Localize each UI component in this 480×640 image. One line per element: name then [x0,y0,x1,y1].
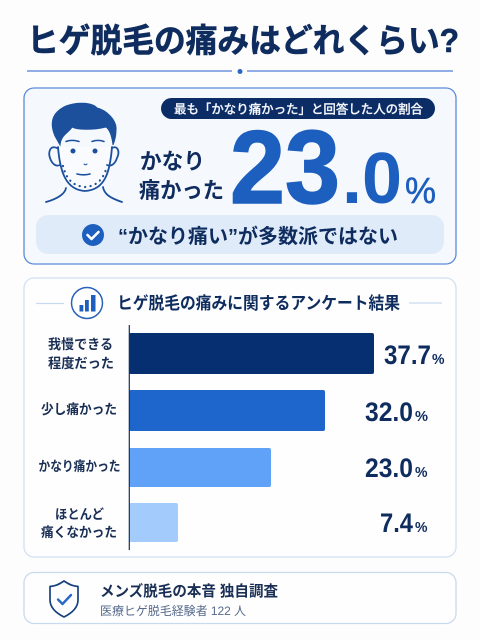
big number: 23.0%: 23 [230,110,340,226]
source details: 医療ヒゲ脱毛経験者 122 人 [100,603,246,618]
title: ヒゲ脱毛の痛みはどれくらい? [27,22,459,59]
bar: bearable 37.7% [48,333,444,374]
bar: bearable 37.7%: % [432,351,444,368]
bar: bearable 37.7%: 37.7 [384,340,431,370]
chart axis [128,325,130,550]
label: very painful: 痛かった [139,178,224,203]
bar: barely painful 7.4% [41,503,428,542]
chart heading [36,288,442,318]
big number: 23.0%: .0 [342,139,402,219]
bar: very painful 23.0%: % [415,464,428,481]
callout: not the majority: “かなり痛い”が多数派ではない [118,224,398,248]
bar chart [38,325,444,550]
bar: barely painful 7.4%: ほとんど [55,507,104,522]
icon: man's face with beard area [46,103,122,202]
title divider [27,69,453,74]
icon: shield with check [50,581,78,617]
chart heading: ヒゲ脱毛の痛みに関するアンケート結果 [117,293,400,313]
bar: a little painful 32.0% [41,390,428,431]
big number: 23.0%: % [405,170,436,211]
callout: not the majority [36,215,444,254]
source title: メンズ脱毛の本音 独自調査 [100,582,278,600]
bar: very painful 23.0%: かなり痛かった [38,459,120,474]
badge: question description: 最も「かなり痛かった」と回答した人の割合 [174,102,423,116]
icon: bar chart [72,288,102,318]
bar: barely painful 7.4%: 痛くなかった [41,525,117,540]
bar: a little painful 32.0%: 少し痛かった [41,401,117,417]
icon: check circle [82,224,104,246]
bar: bearable 37.7%: 我慢できる [48,336,113,352]
label: very painful: かなり [140,149,205,174]
bar: a little painful 32.0%: % [415,408,428,425]
big number: 23.0% [230,110,436,226]
panel: survey results [24,278,456,557]
bar: barely painful 7.4%: 7.4 [380,508,413,538]
bar: very painful 23.0%: 23.0 [365,453,413,483]
bar: a little painful 32.0%: 32.0 [365,397,413,427]
bar: barely painful 7.4%: % [415,519,428,536]
panel: survey source [24,572,456,624]
bar: very painful 23.0% [38,448,428,487]
panel: headline statistic [24,88,456,264]
bar: bearable 37.7%: 程度だった [48,356,114,371]
badge: question description [161,98,435,119]
label: very painful [139,149,224,203]
